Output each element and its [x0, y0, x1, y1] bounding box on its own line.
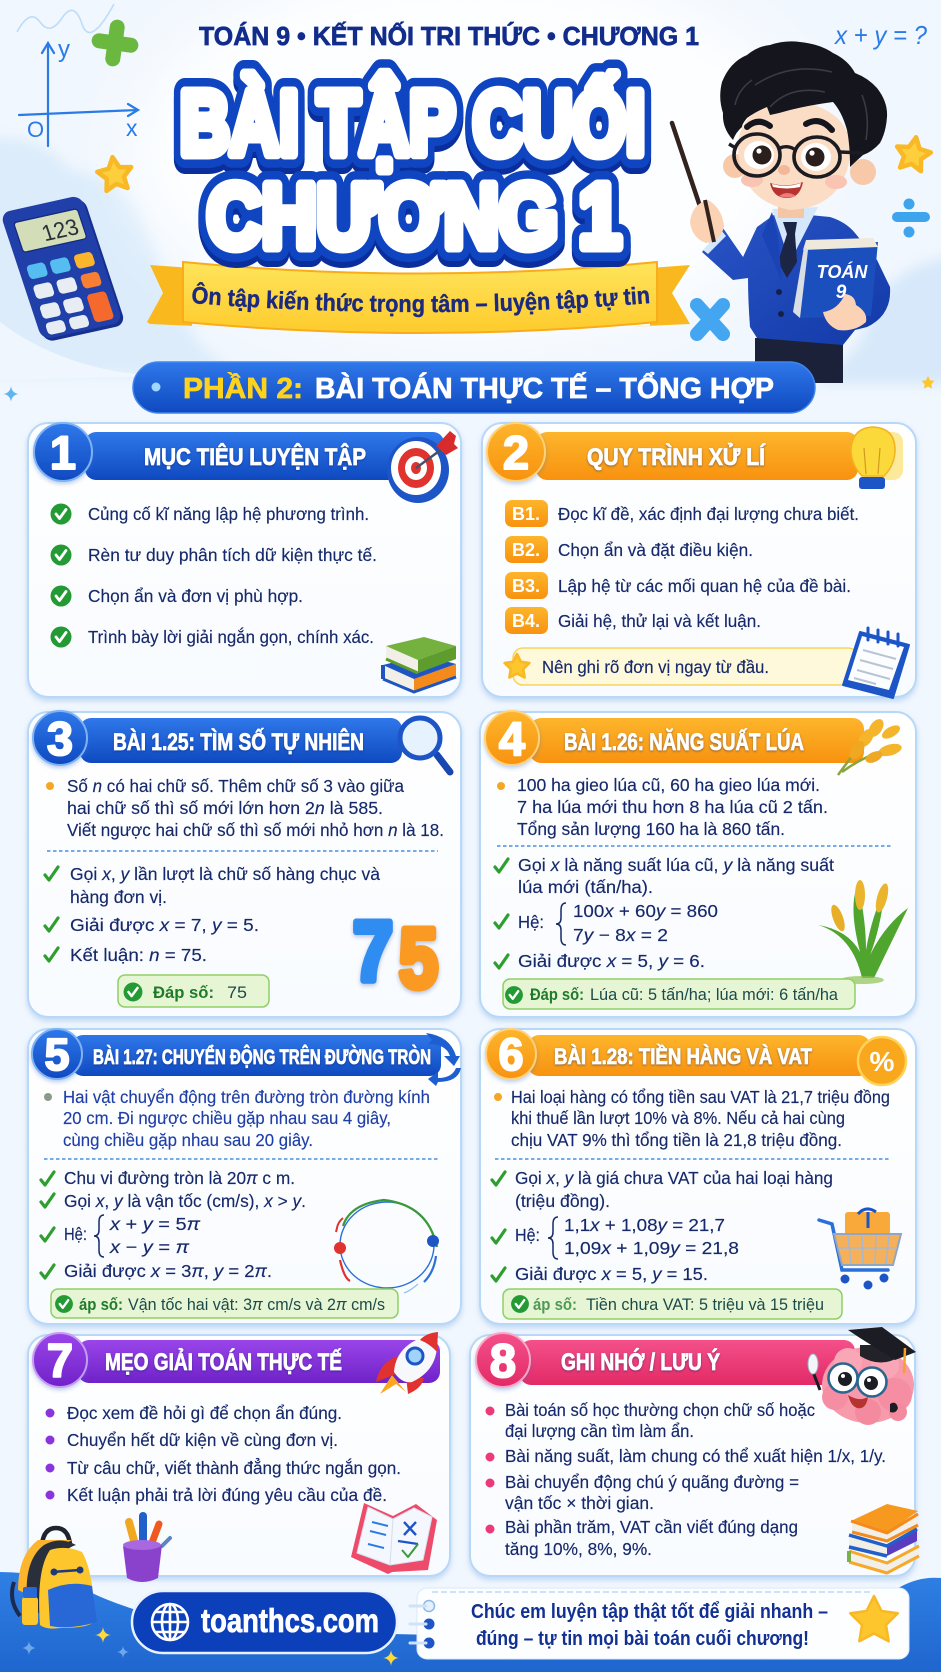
header bar: [33, 1333, 440, 1387]
icon: brain mascot: [808, 1327, 916, 1425]
panel 5: chuyển động tròn: [28, 1029, 461, 1324]
answer box: Đáp số:: [153, 983, 214, 1002]
header bar: BÀI 1.26: NĂNG SUẤT LÚA: [564, 728, 804, 756]
notes list: vận tốc × thời gian.: [505, 1493, 654, 1513]
problem statement: 100 ha gieo lúa cũ, 60 ha gieo lúa mới.: [517, 775, 820, 795]
big number 75: 5: [399, 911, 438, 1005]
website pill: [132, 1591, 397, 1653]
solution steps: lúa mới (tấn/ha).: [518, 877, 653, 897]
section pill: BÀI TOÁN THỰC TẾ – TỔNG HỢP: [315, 371, 774, 405]
answer box: 75: [227, 983, 247, 1002]
icon: pencil cup: [123, 1516, 170, 1582]
panel 2: quy trình: [482, 423, 916, 698]
solution steps: [492, 1168, 833, 1284]
icon: percent badge: %: [870, 1046, 895, 1077]
solution steps: Chu vi đường tròn là 20π c m.: [64, 1168, 295, 1188]
answer box: [503, 979, 855, 1009]
header bar: BÀI 1.25: TÌM SỐ TỰ NHIÊN: [113, 728, 364, 756]
header bar: [34, 423, 444, 481]
answer box: Vận tốc hai vật: 3π cm/s và 2π cm/s: [128, 1295, 385, 1314]
header bar: [486, 1029, 870, 1080]
solution steps: x − y = π: [109, 1237, 189, 1257]
steps: Lập hệ từ các mối quan hệ của đề bài.: [558, 576, 851, 596]
problem statement: khi thuế lần lượt 10% và 8%. Nếu cả hai cùng: [511, 1108, 845, 1128]
icon: star: [850, 1596, 898, 1641]
solution steps: Gọi x, y là vận tốc (cm/s), x > y.: [64, 1191, 306, 1211]
header bar: 3: [47, 712, 73, 765]
icon: coordinate axes: y: [58, 36, 70, 63]
notes list: đại lượng cần tìm làm ẩn.: [505, 1421, 694, 1441]
checklist: Rèn tư duy phân tích dữ kiện thực tế.: [88, 545, 377, 565]
header bar: [32, 1029, 441, 1080]
icon: x sign: [697, 305, 723, 334]
icon: calculator: 123: [38, 214, 82, 246]
icon: open book: [351, 1503, 437, 1574]
header bar: [33, 711, 402, 765]
notes list: Bài toán số học thường chọn chữ số hoặc: [505, 1400, 815, 1420]
section pill: [133, 362, 815, 413]
big number 75: 7: [353, 904, 393, 998]
header bar: [485, 711, 864, 765]
solution steps: [45, 864, 380, 965]
solution steps: [495, 855, 834, 971]
sparkle left: [3, 386, 19, 402]
big number 75: [353, 904, 438, 1005]
solution steps: Gọi x, y là giá chưa VAT của hai loại hàng: [515, 1168, 833, 1188]
title: CHƯƠNG 1: [207, 167, 621, 267]
header bar: [487, 423, 903, 481]
tips list: Kết luận phải trả lời đúng yêu cầu của đề.: [67, 1485, 387, 1505]
header bar: [476, 1333, 855, 1387]
icon: backpack: [12, 1528, 97, 1629]
steps: Đọc kĩ đề, xác định đại lượng chưa biết.: [558, 504, 859, 524]
steps: Chọn ẩn và đặt điều kiện.: [558, 540, 753, 560]
answer box: Lúa cũ: 5 tấn/ha; lúa mới: 6 tấn/ha: [590, 985, 839, 1004]
header bar: BÀI 1.28: TIỀN HÀNG VÀ VAT: [554, 1044, 812, 1069]
ribbon text: Ôn tập kiến thức trọng tâm – luyện tập tự tin: [192, 282, 650, 318]
notes list: tăng 10%, 8%, 9%.: [505, 1539, 652, 1559]
checklist: [50, 504, 377, 648]
section pill: PHẦN 2:: [183, 371, 303, 405]
answer box: Đáp số:: [530, 985, 584, 1004]
problem statement: [494, 1087, 890, 1150]
problem statement: Tổng sản lượng 160 ha là 860 tấn.: [517, 819, 785, 839]
heading: top line: TOÁN 9 • KẾT NỐI TRI THỨC • CHƯƠNG 1: [199, 21, 699, 51]
message box: [410, 1588, 909, 1659]
ribbon: [147, 262, 690, 333]
decorative squiggle: [17, 4, 114, 32]
problem statement: Hai loại hàng có tổng tiền sau VAT là 21,7 triệu đồng: [511, 1087, 890, 1107]
checklist: Trình bày lời giải ngắn gọn, chính xác.: [88, 626, 374, 647]
website pill: toanthcs.com: [201, 1602, 379, 1639]
notes list: Bài năng suất, làm chung có thể xuất hiện 1/x, 1/y.: [505, 1446, 886, 1466]
steps: [505, 500, 859, 634]
icon: book stack: [849, 1504, 919, 1573]
answer box: [118, 975, 269, 1007]
solution steps: Giải được x = 7, y = 5.: [70, 915, 259, 935]
steps: Giải hệ, thử lại và kết luận.: [558, 611, 761, 631]
problem statement: Hai vật chuyển động trên đường tròn đường kính: [63, 1087, 430, 1107]
panel 4: năng suất lúa: [480, 711, 916, 1017]
problem statement: cùng chiều gặp nhau sau 20 giây.: [63, 1130, 313, 1150]
solution steps: Kết luận: n = 75.: [70, 945, 207, 965]
answer box: [503, 1289, 842, 1319]
solution steps: 1,1x + 1,08y = 21,7: [564, 1215, 725, 1235]
header bar: 2: [503, 426, 529, 479]
solution steps: Gọi x, y lần lượt là chữ số hàng chục và: [70, 864, 380, 884]
title: [180, 72, 645, 267]
header bar: MỤC TIÊU LUYỆN TẬP: [144, 443, 366, 471]
notes list: Bài phần trăm, VAT cần viết đúng dạng: [505, 1517, 798, 1537]
steps: B1.: [512, 504, 540, 524]
tips list: [46, 1403, 401, 1505]
tips list: Chuyển hết dữ kiện về cùng đơn vị.: [67, 1430, 338, 1450]
notes list: Bài chuyển động chú ý quãng đường =: [505, 1472, 799, 1492]
icon: divide sign: [892, 198, 930, 238]
bottom wave: [0, 1572, 941, 1672]
icon: magnifier: [400, 718, 450, 772]
chart: circular motion diagram: [334, 1200, 439, 1293]
notebook rings: [410, 1600, 434, 1648]
answer box: áp số:: [533, 1295, 577, 1314]
message box: đúng – tự tin mọi bài toán cuối chương!: [476, 1628, 809, 1650]
header bar: 6: [498, 1029, 524, 1080]
header bar: 5: [44, 1029, 70, 1080]
solution steps: Gọi x là năng suất lúa cũ, y là năng suất: [518, 855, 834, 875]
notes list: [486, 1400, 886, 1559]
icon: green plus: [97, 25, 133, 61]
problem statement: [497, 775, 828, 839]
answer box: áp số:: [79, 1295, 123, 1314]
answer box: Tiền chưa VAT: 5 triệu và 15 triệu: [586, 1295, 824, 1314]
icon: wheat: [838, 716, 903, 775]
solution steps: Hệ:: [518, 912, 544, 932]
panel 7: mẹo giải toán: [28, 1332, 450, 1582]
panel 3: tìm số tự nhiên: [28, 711, 461, 1017]
solution steps: (triệu đồng).: [515, 1191, 610, 1211]
panel 1: mục tiêu: [28, 423, 461, 697]
steps: B4.: [512, 611, 540, 631]
header bar: 7: [47, 1334, 73, 1387]
message box: Chúc em luyện tập thật tốt để giải nhanh –: [471, 1601, 828, 1623]
icon: calculator: [0, 195, 126, 343]
icon: rice plant: [818, 880, 908, 984]
solution steps: 7y − 8x = 2: [573, 925, 668, 945]
problem statement: chịu VAT 9% thì tổng tiền là 21,8 triệu đồng.: [511, 1130, 842, 1150]
solution steps: hàng đơn vị.: [70, 887, 167, 907]
problem statement: 20 cm. Đi ngược chiều gặp nhau sau 4 giây,: [63, 1108, 391, 1128]
icon: rocket: [376, 1332, 438, 1394]
icon: percent badge: [858, 1037, 906, 1085]
icon: coordinate axes: O: [27, 117, 44, 142]
problem statement: Số n có hai chữ số. Thêm chữ số 3 vào giữa: [67, 776, 404, 796]
steps: B2.: [512, 540, 540, 560]
header bar: QUY TRÌNH XỬ LÍ: [587, 442, 766, 471]
icon: yellow star left: [96, 155, 134, 192]
icon: yellow star right: [894, 134, 933, 172]
icon: coordinate axes: x: [126, 115, 138, 141]
header bar: 8: [490, 1334, 516, 1387]
problem statement: Viết ngược hai chữ số thì số mới nhỏ hơn n là 18.: [67, 820, 444, 840]
tip box: [505, 648, 858, 685]
sparkles: [22, 1627, 399, 1666]
checklist: Chọn ẩn và đơn vị phù hợp.: [88, 586, 303, 606]
icon: notebook: [843, 628, 909, 698]
solution steps: 1,09x + 1,09 y = 21,8: [564, 1238, 739, 1258]
panel 6: tiền hàng và VAT: [480, 1029, 916, 1324]
icon: books: [383, 637, 456, 692]
solution steps: x + y = 5π: [109, 1214, 200, 1234]
header bar: MẸO GIẢI TOÁN THỰC TẾ: [105, 1347, 342, 1376]
title: BÀI TẬP CUỐI: [180, 72, 645, 174]
title: CHƯƠNG 1: [207, 167, 621, 267]
panel 8: ghi nhớ: [470, 1327, 919, 1576]
icon: coordinate axes: [19, 36, 138, 146]
problem statement: hai chữ số thì số mới lớn hơn 2n là 585.: [67, 798, 383, 818]
character: boy teacher: [672, 41, 890, 383]
steps: B3.: [512, 576, 540, 596]
sparkle small star: [921, 376, 935, 389]
solution steps: [41, 1168, 306, 1281]
problem statement: [46, 776, 444, 840]
header bar: BÀI 1.27: CHUYỂN ĐỘNG TRÊN ĐƯỜNG TRÒN: [93, 1045, 431, 1069]
formula: x+y=?: x + y = ?: [833, 20, 927, 50]
checklist: Củng cố kĩ năng lập hệ phương trình.: [88, 504, 369, 524]
solution steps: 100x + 60y = 860: [573, 901, 718, 921]
header bar: GHI NHỚ / LƯU Ý: [561, 1348, 720, 1376]
icon: shopping cart: [819, 1209, 901, 1290]
solution steps: Hệ:: [64, 1224, 87, 1244]
title: BÀI TẬP CUỐI: [180, 72, 645, 174]
character: boy teacher: 9: [836, 282, 847, 303]
solution steps: Hệ:: [515, 1225, 540, 1245]
icon: light bulb: [851, 427, 895, 489]
header bar: 1: [50, 426, 76, 479]
solution steps: Giải được x = 5, y = 15.: [515, 1264, 708, 1284]
tips list: Đọc xem đề hỏi gì để chọn ẩn đúng.: [67, 1403, 342, 1423]
problem statement: 7 ha lúa mới thu hơn 8 ha lúa cũ 2 tấn.: [517, 797, 828, 817]
header bar: 4: [499, 712, 525, 765]
answer box: [51, 1289, 398, 1318]
solution steps: Giải được x = 3π, y = 2π.: [64, 1261, 272, 1281]
tips list: Từ câu chữ, viết thành đẳng thức ngắn gọn.: [67, 1457, 401, 1478]
character: boy teacher: TOÁN: [817, 261, 868, 282]
tip box: Nên ghi rõ đơn vị ngay từ đầu.: [542, 657, 769, 677]
solution steps: Giải được x = 5, y = 6.: [518, 951, 705, 971]
icon: circular arrows: [426, 1033, 461, 1086]
icon: globe: [152, 1604, 188, 1640]
icon: target: [387, 431, 458, 503]
problem statement: [44, 1087, 430, 1150]
